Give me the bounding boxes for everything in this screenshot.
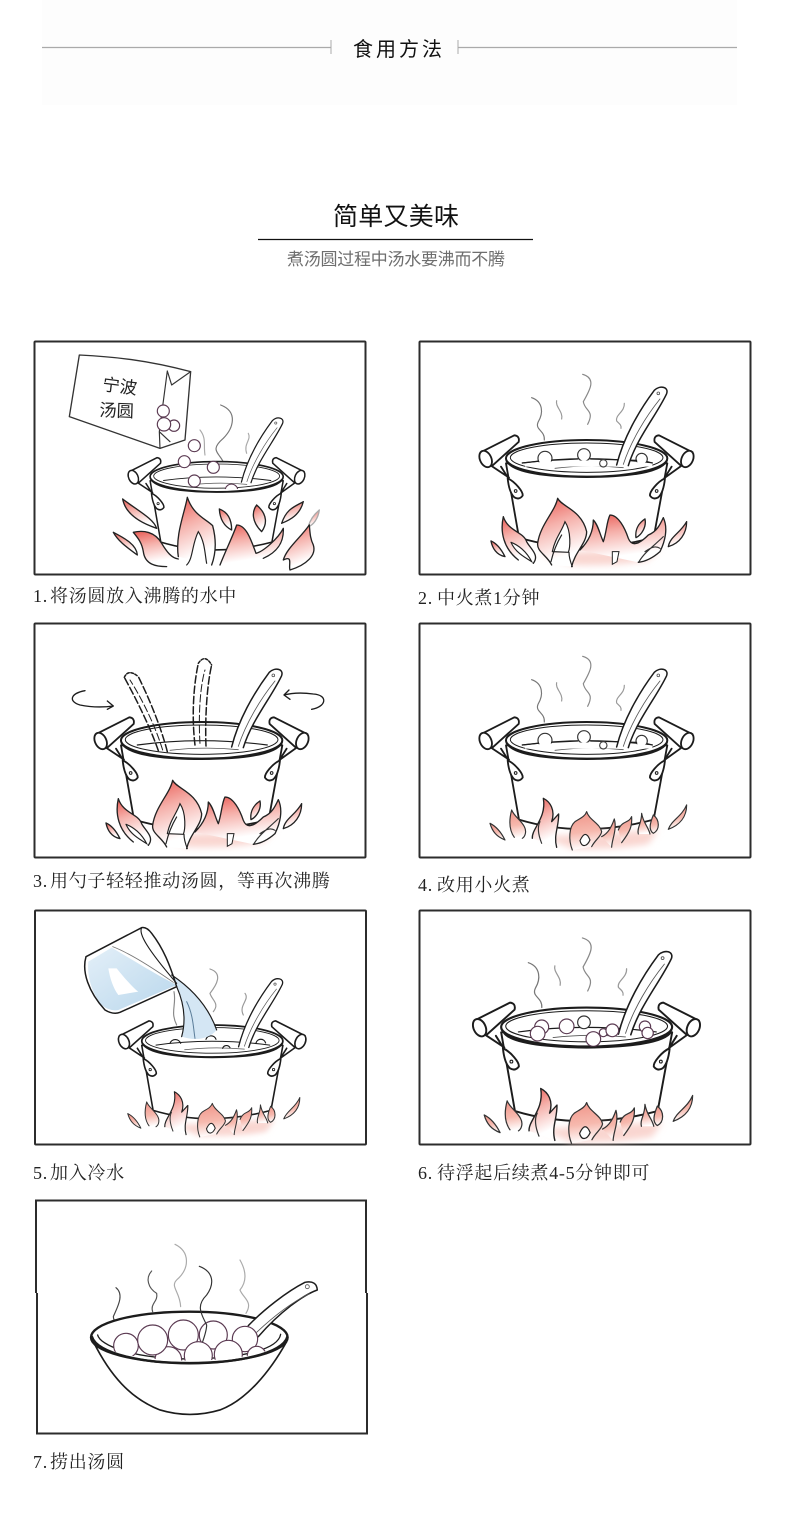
steam bbox=[528, 938, 627, 1008]
panel: step 5 add cold water bbox=[35, 910, 366, 1144]
flames: large bbox=[491, 498, 687, 567]
bowl front rim bbox=[92, 1337, 287, 1363]
icon: pot with ladle bbox=[92, 669, 311, 829]
water stream bbox=[172, 975, 217, 1039]
caption: step 5: 5. bbox=[33, 1163, 48, 1183]
icon: pot with ladle and flames bbox=[116, 979, 308, 1137]
icon: bowl bbox=[91, 1312, 288, 1414]
icon: pot bbox=[470, 1003, 703, 1121]
caption: step 1: 1. bbox=[33, 586, 48, 606]
caption: step 4: 4. bbox=[418, 875, 433, 895]
caption: step 4: 改用小火煮 bbox=[437, 875, 530, 895]
icon: pot with tangyuan and ladle bbox=[477, 387, 696, 547]
caption: step 2: 中火煮1分钟 bbox=[437, 588, 540, 608]
icon: spoon bbox=[248, 1282, 317, 1337]
icon: tangyuan bag: 宁波 bbox=[101, 370, 139, 399]
arrow: clockwise left bbox=[72, 691, 113, 709]
icon: measuring jug bbox=[85, 928, 177, 1013]
icon: ladle bbox=[618, 952, 672, 1035]
caption: step 2: 2. bbox=[418, 588, 433, 608]
caption: step 3: 用勺子轻轻推动汤圆，等再次沸腾 bbox=[50, 871, 330, 891]
icon: tangyuan bag bbox=[69, 355, 191, 448]
dashed ladle ghost middle bbox=[193, 659, 212, 746]
steam bbox=[113, 1244, 249, 1335]
panel: step 1 pour tangyuan into boiling water bbox=[34, 342, 366, 574]
subtitle: 煮汤圆过程中汤水要沸而不腾 bbox=[287, 250, 505, 269]
caption: step 1: 将汤圆放入沸腾的水中 bbox=[50, 586, 237, 606]
steam bbox=[532, 374, 624, 440]
icon: pot with ladle bbox=[126, 418, 307, 550]
faint header background bbox=[42, 0, 737, 105]
icon: tangyuan bag: 汤圆 bbox=[99, 396, 134, 422]
steam bbox=[532, 656, 624, 722]
tangyuan balls bbox=[170, 1036, 266, 1048]
caption: step 3: 3. bbox=[33, 871, 48, 891]
flames: small bbox=[484, 1088, 693, 1143]
panel: step 4 low heat bbox=[420, 624, 750, 858]
caption: step 6: 待浮起后续煮4-5分钟即可 bbox=[437, 1163, 650, 1183]
tangyuan balls bbox=[504, 1016, 670, 1048]
icon: pot with tangyuan and ladle bbox=[477, 669, 696, 829]
flames: small bbox=[490, 798, 687, 850]
dashed ladle ghost left bbox=[124, 673, 167, 752]
heading underline bbox=[258, 238, 533, 240]
panel: step 2 medium heat 1 minute bbox=[420, 342, 750, 574]
caption: step 7: 7. bbox=[33, 1452, 48, 1472]
panel: step 3 stir gently bbox=[34, 624, 366, 858]
steam bbox=[200, 405, 249, 472]
steam over balls bbox=[199, 1266, 212, 1342]
flames bbox=[113, 497, 319, 570]
caption: step 7: 捞出汤圆 bbox=[50, 1452, 125, 1472]
panel: step 7 scoop out bbox=[36, 1200, 367, 1434]
caption: step 6: 6. bbox=[418, 1163, 433, 1183]
tangyuan balls bbox=[113, 1319, 266, 1360]
heading: 简单又美味: 简单又美味 bbox=[333, 203, 459, 231]
tangyuan balls falling bbox=[178, 440, 238, 489]
caption: step 5: 加入冷水 bbox=[50, 1163, 125, 1183]
flames: large bbox=[106, 780, 302, 849]
ball in front of ladle bbox=[606, 1024, 619, 1037]
section header: 食用方法: 食用方法 bbox=[353, 38, 442, 61]
panel: step 6 simmer after floating bbox=[420, 910, 750, 1144]
steam bbox=[174, 969, 246, 1025]
arrow: clockwise right bbox=[284, 690, 324, 709]
